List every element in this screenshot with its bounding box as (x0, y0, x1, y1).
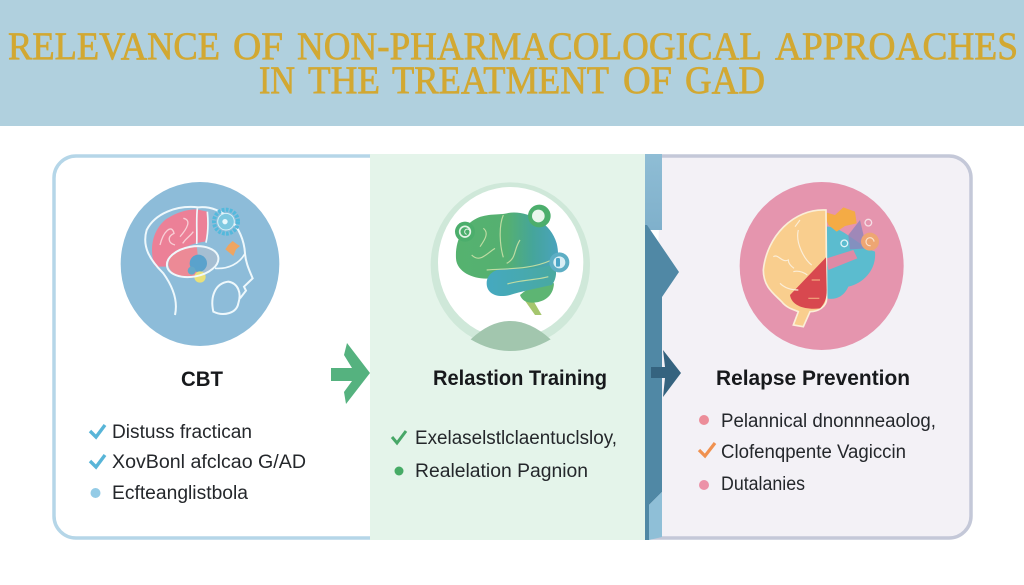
bullet list: Relaxation Training: Exelaselstlclaentuclsloy, (415, 428, 617, 449)
bullet list: Relapse Prevention: Pelannical dnonnneaolog, (721, 411, 936, 432)
icon: green brain (431, 182, 590, 351)
title (8, 25, 1018, 102)
bullet list: CBT: XovBonl afclcao G/AD (112, 452, 306, 473)
title: NON-PHARMACOLOGICAL (297, 25, 762, 68)
arrow: green (331, 343, 370, 404)
divider strip with arrow (645, 154, 679, 540)
title: RELEVANCE (8, 25, 220, 68)
title: OF (623, 59, 672, 102)
bullet list: Relaxation Training: Realelation Pagnion (415, 461, 588, 482)
title: THE (308, 59, 380, 102)
bullet list: Relapse Prevention: Clofenqpente Vagiccin (721, 442, 906, 463)
title: OF (233, 25, 283, 68)
title: IN (259, 59, 295, 102)
header band (0, 0, 1024, 126)
bullet list: CBT: Distuss fractican (112, 422, 252, 443)
bullet list: Relapse Prevention (699, 411, 936, 495)
bullet list: CBT (90, 422, 306, 504)
title: TREATMENT (392, 59, 609, 102)
heading: CBT: CBT (181, 368, 223, 391)
heading: Relaxation Training: Relastion Training (433, 367, 607, 390)
arrow: dark blue (651, 350, 681, 397)
bullet list: CBT: Ecfteanglistbola (112, 483, 248, 504)
icon: head with brain (121, 182, 279, 346)
icon: colourful brain (740, 182, 904, 350)
bullet list: Relaxation Training (392, 428, 617, 482)
panel: Relaxation Training (370, 154, 646, 540)
panel: CBT (54, 156, 370, 538)
heading: Relapse Prevention: Relapse Prevention (716, 367, 910, 390)
bullet list: Relapse Prevention: Dutalanies (721, 474, 805, 495)
title: GAD (685, 59, 765, 102)
panel: Relapse Prevention (646, 156, 971, 538)
title: APPROACHES (775, 25, 1018, 68)
